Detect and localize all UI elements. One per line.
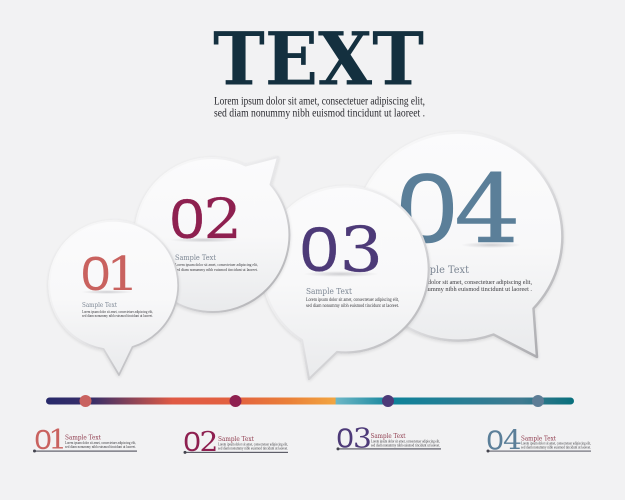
legend 02	[184, 426, 288, 458]
number 02: 2	[204, 187, 242, 251]
description 03	[306, 297, 399, 309]
timeline	[46, 395, 574, 407]
legend 01: 1	[48, 424, 67, 456]
legend 01	[33, 424, 137, 456]
number 03	[300, 215, 383, 286]
marker 03	[382, 395, 394, 407]
legend 01: 0	[34, 424, 52, 456]
legend 02: sed diam nonummy nibh euismod tincidunt ut laoreet.	[218, 446, 288, 450]
description 04	[394, 279, 532, 293]
legend 03: sed diam nonummy nibh euismod tincidunt ut laoreet.	[371, 442, 440, 448]
legend 03: Lorem ipsum dolor sit amet, consectetuer adipiscing elit,	[371, 438, 440, 444]
number 03: 3	[340, 215, 383, 286]
description 04: sed diam nonummy nibh euismod tincidunt ut laoreet .	[394, 286, 532, 293]
legend 03: Sample Text	[370, 432, 406, 440]
subtitle	[214, 96, 425, 120]
legend 01: Sample Text	[65, 434, 101, 442]
description 01: sed diam nonummy nibh euismod tincidunt ut laoreet.	[82, 313, 153, 318]
description 02: Lorem ipsum dolor sit amet, consectetuer adipiscing elit,	[175, 262, 258, 268]
legend 04	[486, 425, 591, 456]
bubble 01	[49, 221, 178, 375]
label 01: Sample Text	[82, 302, 117, 309]
description 02: sed diam nonummy nibh euismod tincidunt ut laoreet.	[175, 267, 258, 272]
legend 03: 0	[336, 423, 354, 454]
bubble 04	[354, 133, 562, 357]
description 03: sed diam nonummy nibh euismod tincidunt ut laoreet.	[306, 303, 399, 309]
marker 04	[532, 395, 544, 407]
legend 02: Lorem ipsum dolor sit amet, consectetuer adipiscing elit,	[218, 442, 288, 448]
label 04: Sample Text	[408, 265, 469, 276]
legend 04: 0	[486, 425, 504, 456]
marker 01	[80, 395, 92, 407]
title: TEXT	[213, 16, 424, 102]
number 02	[170, 187, 242, 251]
number 01: 1	[106, 246, 139, 301]
subtitle: sed diam nonummy nibh euismod tincidunt ut laoreet .	[214, 108, 425, 120]
legend 04: Lorem ipsum dolor sit amet, consectetuer adipiscing elit,	[521, 440, 591, 446]
legend 03: 3	[353, 423, 372, 454]
number 02: 0	[170, 189, 204, 250]
marker 02	[230, 395, 242, 407]
description 04: Lorem ipsum dolor sit amet, consectetuer adipiscing elit,	[394, 279, 532, 286]
number 01: 0	[81, 246, 110, 300]
description 02	[175, 262, 258, 272]
bubble 02	[135, 157, 289, 312]
legend 04: sed diam nonummy nibh euismod tincidunt ut laoreet.	[521, 444, 591, 450]
legend 01: sed diam nonummy nibh euismod tincidunt ut laoreet.	[65, 444, 136, 449]
legend 04: 4	[503, 425, 522, 456]
number 03: 0	[300, 215, 339, 285]
legend 04: Sample Text	[521, 434, 556, 442]
legend 01: Lorem ipsum dolor sit amet, consectetuer adipiscing elit,	[65, 440, 136, 446]
description 01	[82, 309, 153, 318]
description 01: Lorem ipsum dolor sit amet, consectetuer adipiscing elit,	[82, 309, 153, 315]
number 01	[81, 246, 139, 301]
label 03: Sample Text	[306, 287, 353, 296]
description 03: Lorem ipsum dolor sit amet, consectetuer adipiscing elit,	[306, 297, 399, 303]
legend 02: Sample Text	[218, 435, 254, 443]
subtitle: Lorem ipsum dolor sit amet, consectetuer adipiscing elit,	[214, 96, 425, 108]
legend 03	[336, 423, 441, 454]
number 04	[397, 154, 521, 265]
number 04: 4	[454, 154, 521, 265]
legend 02: 2	[199, 426, 218, 458]
bubble 03	[263, 186, 429, 379]
label 02: Sample Text	[175, 253, 216, 262]
legend 02: 0	[184, 426, 201, 458]
number 04: 0	[397, 154, 457, 263]
